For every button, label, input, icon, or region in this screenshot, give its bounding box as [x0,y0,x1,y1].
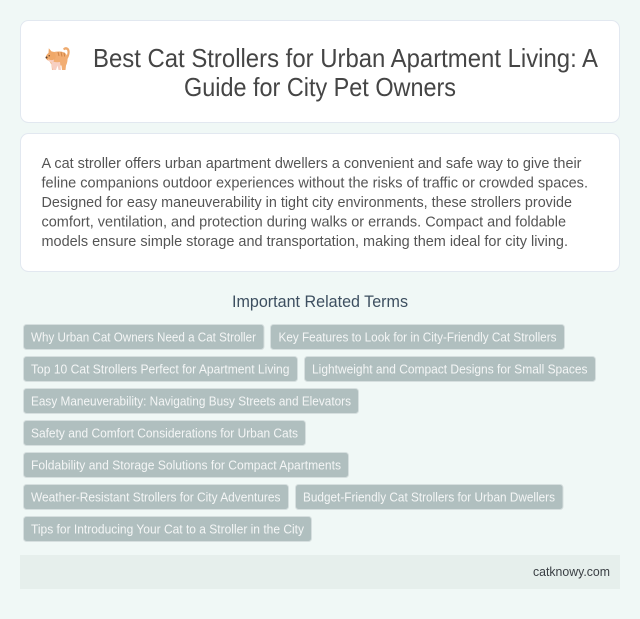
tag: top 10: Top 10 Cat Strollers Perfect for Apartment Living [31,362,290,376]
tag: safety and comfort [24,420,306,446]
footer source text: catknowy.com [533,564,610,579]
tag: why urban cat owners: Why Urban Cat Owners Need a Cat Stroller [31,330,257,344]
tag: budget-friendly [296,484,563,510]
icon: cat [46,47,70,70]
tag: budget-friendly: Budget-Friendly Cat Strollers for Urban Dwellers [303,490,555,504]
tag: key features [270,324,564,350]
text block: paragraph: models ensure simple storage and transportation, making them ideal for city living. [42,233,568,250]
heading: important related terms: Important Related Terms [232,293,408,311]
title text [93,43,599,102]
tag: easy maneuverability: Easy Maneuverability: Navigating Busy Streets and Elevators [31,394,351,408]
footer bar [20,555,620,589]
text block: paragraph: feline companions outdoor experiences without the risks of traffic or crowded spaces. [42,174,588,192]
text block: paragraph: Designed for easy maneuverability in tight city environments, these strollers provide [42,194,572,211]
panel: title card [20,20,620,122]
tag: foldability and storage: Foldability and Storage Solutions for Compact Apartments [31,458,341,472]
tag: top 10 [24,356,298,382]
tag: weather-resistant: Weather-Resistant Strollers for City Adventures [31,490,281,504]
text block: paragraph: comfort, ventilation, and protection during walks or errands. Compact and foldable [42,214,566,230]
tag: lightweight and compact [304,356,596,382]
tag: why urban cat owners [24,324,264,350]
tag: foldability and storage [24,452,348,478]
tag: tips for introducing [24,516,312,542]
title text: Guide for City Pet Owners [184,72,456,102]
title text: Best Cat Strollers for Urban Apartment Living: A [93,43,599,73]
tag: weather-resistant [24,484,288,510]
text block: paragraph [42,155,588,250]
tag: lightweight and compact: Lightweight and Compact Designs for Small Spaces [312,362,588,376]
tag: easy maneuverability [24,388,358,414]
tag: key features: Key Features to Look for in City-Friendly Cat Strollers [278,330,557,344]
panel: intro paragraph [20,134,620,272]
text block: paragraph: A cat stroller offers urban apartment dwellers a convenient and safe way to give their [42,155,582,172]
tag: tips for introducing: Tips for Introducing Your Cat to a Stroller in the City [31,522,304,536]
tag: safety and comfort: Safety and Comfort Considerations for Urban Cats [31,426,298,440]
